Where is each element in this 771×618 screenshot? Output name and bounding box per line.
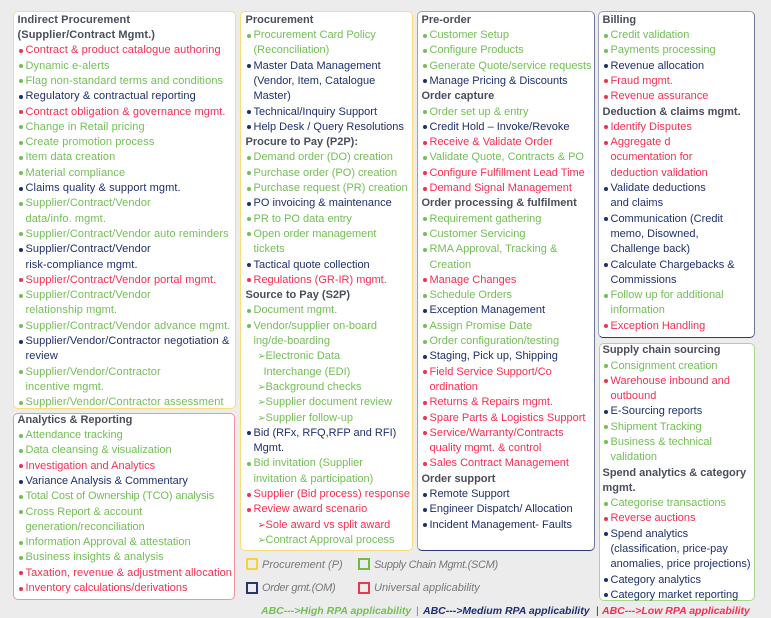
panel: supply chain sourcing bbox=[599, 343, 755, 601]
heading: order processing: Order processing & fulfilment bbox=[422, 197, 577, 209]
heading: indirect procurement: (Supplier/Contract Mgmt.) bbox=[18, 29, 155, 41]
list: source to pay items: invitation & participation) bbox=[254, 473, 373, 485]
list: source to pay items: Document mgmt. bbox=[254, 304, 337, 316]
list: spend analytics items: Spend analytics bbox=[610, 528, 688, 540]
list: analytics items: Investigation and Analytics bbox=[26, 460, 155, 472]
list: indirect procurement items: Supplier/Vendor/Contractor bbox=[26, 366, 161, 378]
legend item: procurement: Procurement (P) bbox=[262, 559, 343, 571]
list: source to pay items: ing/de-boarding bbox=[254, 335, 330, 347]
list: order processing items: Returns & Repairs mgmt. bbox=[430, 396, 553, 408]
legend item: order management: Order gmt.(OM) bbox=[262, 582, 335, 594]
list: billing items: Payments processing bbox=[610, 44, 716, 56]
heading: order support: Order support bbox=[422, 473, 495, 485]
list: order processing items: Field Service Support/Co bbox=[430, 366, 552, 378]
list: analytics items: Business insights & analysis bbox=[26, 551, 164, 563]
list: procurement items: Procurement Card Policy bbox=[254, 29, 376, 41]
list: deduction items: ocumentation for bbox=[610, 151, 692, 163]
list: analytics items: Variance Analysis & Commentary bbox=[26, 475, 188, 487]
list: deduction items: Validate deductions bbox=[610, 182, 706, 194]
list: procure to pay items: Regulations (GR-IR) mgmt. bbox=[254, 274, 387, 286]
list: indirect procurement items: incentive mgmt. bbox=[26, 381, 104, 393]
list: procurement items: (Reconciliation) bbox=[254, 44, 329, 56]
heading: billing: Billing bbox=[602, 14, 636, 26]
list: analytics items: Information Approval & attestation bbox=[26, 536, 191, 548]
list: indirect procurement items: Supplier/Contract/Vendor advance mgmt. bbox=[26, 320, 230, 332]
panel: analytics and reporting bbox=[13, 413, 235, 600]
list: indirect procurement items: Item data creation bbox=[26, 151, 115, 163]
list: order processing items: Manage Changes bbox=[430, 274, 516, 286]
list: indirect procurement items: Material compliance bbox=[26, 167, 125, 179]
list: source to pay items: Sole award vs split award bbox=[266, 519, 390, 531]
list: deduction items: and claims bbox=[610, 197, 663, 209]
list: procure to pay items: Open order management bbox=[254, 228, 376, 240]
list: procurement items: (Vendor, Item, Catalogue bbox=[254, 75, 375, 87]
key: high applicability: ABC--->High RPA applicability bbox=[261, 605, 411, 617]
list: order processing items bbox=[423, 213, 586, 469]
list: pre-order items: Generate Quote/service requests bbox=[430, 60, 592, 72]
list: billing items: Fraud mgmt. bbox=[610, 75, 673, 87]
list: deduction items: Exception Handling bbox=[610, 320, 705, 332]
list: order capture items: Receive & Validate Order bbox=[430, 136, 553, 148]
list: source to pay items: Supplier document review bbox=[266, 396, 392, 408]
list: source to pay items: Electronic Data bbox=[266, 350, 340, 362]
heading: order capture: Order capture bbox=[422, 90, 494, 102]
list: source to pay items: Vendor/supplier on-board bbox=[254, 320, 377, 332]
list: order capture items: Credit Hold – Invoke/Revoke bbox=[430, 121, 570, 133]
list: procure to pay items: PO invoicing & maintenance bbox=[254, 197, 392, 209]
legend: RPA applicability key bbox=[260, 605, 750, 617]
list: order processing items: Exception Management bbox=[430, 304, 545, 316]
list: sourcing items: Shipment Tracking bbox=[610, 421, 702, 433]
list: indirect procurement items: Flag non-standard terms and conditions bbox=[26, 75, 223, 87]
list: deduction items: Commissions bbox=[610, 274, 677, 286]
list: procure to pay items bbox=[247, 151, 408, 286]
list: spend analytics items: Category market reporting bbox=[610, 589, 738, 601]
list: order processing items: Service/Warranty/Contracts bbox=[430, 427, 564, 439]
list: deduction items: memo, Disowned, bbox=[610, 228, 699, 240]
list: procure to pay items: Purchase request (PR) creation bbox=[254, 182, 408, 194]
list: indirect procurement items: Dynamic e-alerts bbox=[26, 60, 110, 72]
list: order processing items: Customer Servicing bbox=[430, 228, 525, 240]
panel: billing and deductions bbox=[598, 11, 755, 338]
list: procurement items: Help Desk / Query Resolutions bbox=[254, 121, 404, 133]
list: source to pay items: Background checks bbox=[266, 381, 362, 393]
heading: deduction and claims: Deduction & claims mgmt. bbox=[602, 106, 741, 118]
legend item: universal applicability: Universal applicability bbox=[374, 582, 480, 594]
list: sourcing items: Warehouse inbound and bbox=[610, 375, 730, 387]
list: order processing items: Creation bbox=[430, 259, 471, 271]
heading: source to pay: Source to Pay (S2P) bbox=[246, 289, 350, 301]
list: analytics items: Attendance tracking bbox=[26, 429, 123, 441]
list: order processing items: Sales Contract Management bbox=[430, 457, 569, 469]
list: source to pay items: Mgmt. bbox=[254, 442, 284, 454]
list: indirect procurement items: Create promotion process bbox=[26, 136, 154, 148]
heading: analytics and reporting: Analytics & Reporting bbox=[18, 414, 132, 426]
list: procurement items: Technical/Inquiry Support bbox=[254, 106, 377, 118]
list: sourcing items: validation bbox=[610, 451, 657, 463]
list: procurement items: Master Data Management bbox=[254, 60, 381, 72]
list: indirect procurement items: data/info. mgmt. bbox=[26, 213, 106, 225]
panel: procurement bbox=[240, 11, 413, 551]
list: indirect procurement items: review bbox=[26, 350, 58, 362]
list: deduction items: information bbox=[610, 304, 665, 316]
list: source to pay items: Bid invitation (Supplier bbox=[254, 457, 363, 469]
list: source to pay items: Contract Approval process bbox=[266, 534, 395, 546]
list: order processing items: ordination bbox=[430, 381, 478, 393]
list: indirect procurement items: Change in Retail pricing bbox=[26, 121, 145, 133]
heading: indirect procurement bbox=[18, 14, 155, 41]
list: order support items bbox=[423, 488, 573, 531]
heading: supply chain sourcing: Supply chain sourcing bbox=[602, 344, 720, 356]
heading: pre-order: Pre-order bbox=[422, 14, 471, 26]
list: pre-order items: Customer Setup bbox=[430, 29, 509, 41]
list: order processing items: Schedule Orders bbox=[430, 289, 512, 301]
list: indirect procurement items: risk-compliance mgmt. bbox=[26, 259, 138, 271]
legend item: supply chain management: Supply Chain Mgmt.(SCM) bbox=[374, 559, 498, 571]
list: spend analytics items: Categorise transactions bbox=[610, 497, 726, 509]
list: deduction items: Identify Disputes bbox=[610, 121, 692, 133]
heading: procurement: Procurement bbox=[246, 14, 313, 26]
heading: procure to pay: Procure to Pay (P2P): bbox=[246, 136, 358, 148]
list: order processing items: RMA Approval, Tracking & bbox=[430, 243, 557, 255]
list: deduction items: Communication (Credit bbox=[610, 213, 723, 225]
list: deduction items: Challenge back) bbox=[610, 243, 690, 255]
list: order capture items: Order set up & entry bbox=[430, 106, 529, 118]
legend: RPA applicability key: | bbox=[416, 605, 419, 617]
list: analytics items: Inventory calculations/derivations bbox=[26, 582, 188, 594]
list: procure to pay items: PR to PO data entry bbox=[254, 213, 352, 225]
list: procurement items bbox=[247, 29, 404, 133]
list: procure to pay items: Tactical quote collection bbox=[254, 259, 370, 271]
list: analytics items: Cross Report & account bbox=[26, 506, 142, 518]
list: source to pay items: Supplier follow-up bbox=[266, 412, 353, 424]
list: order capture items: Demand Signal Management bbox=[430, 182, 572, 194]
legend: RPA applicability key: | bbox=[596, 605, 599, 617]
list: billing items: Credit validation bbox=[610, 29, 689, 41]
list: pre-order items: Manage Pricing & Discounts bbox=[430, 75, 568, 87]
list: source to pay items bbox=[247, 304, 410, 546]
list: indirect procurement items: Contract & product catalogue authoring bbox=[26, 44, 221, 56]
list: analytics items: Taxation, revenue & adjustment allocation bbox=[26, 567, 232, 579]
list: deduction items: deduction validation bbox=[610, 167, 708, 179]
list: analytics items: generation/reconciliation bbox=[26, 521, 145, 533]
heading: spend analytics: Spend analytics & category bbox=[602, 467, 746, 479]
list: sourcing items: Consignment creation bbox=[610, 360, 718, 372]
list: deduction items: Calculate Chargebacks & bbox=[610, 259, 735, 271]
list: spend analytics items: (classification, price-pay bbox=[610, 543, 728, 555]
list: procure to pay items: Demand order (DO) creation bbox=[254, 151, 393, 163]
list: sourcing items bbox=[604, 360, 730, 463]
list: analytics items: Total Cost of Ownership (TCO) analysis bbox=[26, 490, 214, 502]
list: spend analytics items bbox=[604, 497, 751, 601]
list: spend analytics items: Category analytics bbox=[610, 574, 701, 586]
list: deduction items: Follow up for additional bbox=[610, 289, 724, 301]
list: indirect procurement items: Supplier/Contract/Vendor portal mgmt. bbox=[26, 274, 216, 286]
list: procure to pay items: Purchase order (PO) creation bbox=[254, 167, 397, 179]
list: order processing items: Staging, Pick up, Shipping bbox=[430, 350, 558, 362]
list: sourcing items: outbound bbox=[610, 390, 656, 402]
list: source to pay items: Bid (RFx, RFQ,RFP and RFI) bbox=[254, 427, 396, 439]
list: order processing items: Requirement gathering bbox=[430, 213, 541, 225]
list: order support items: Incident Management- Faults bbox=[430, 519, 572, 531]
heading: indirect procurement: Indirect Procurement bbox=[18, 14, 130, 26]
list: billing items: Revenue assurance bbox=[610, 90, 708, 102]
list: order capture items bbox=[423, 106, 585, 194]
list: sourcing items: Business & technical bbox=[610, 436, 712, 448]
heading: spend analytics bbox=[602, 467, 746, 494]
list: order processing items: Spare Parts & Logistics Support bbox=[430, 412, 585, 424]
list: order capture items: Configure Fulfillment Lead Time bbox=[430, 167, 585, 179]
list: indirect procurement items: Supplier/Contract/Vendor bbox=[26, 197, 151, 209]
list: sourcing items: E-Sourcing reports bbox=[610, 405, 702, 417]
list: indirect procurement items: Claims quality & support mgmt. bbox=[26, 182, 181, 194]
list: procure to pay items: tickets bbox=[254, 243, 285, 255]
heading: spend analytics: mgmt. bbox=[602, 482, 636, 494]
list: indirect procurement items bbox=[19, 44, 230, 408]
list: indirect procurement items: Supplier/Contract/Vendor auto reminders bbox=[26, 228, 229, 240]
panel: order management bbox=[417, 11, 595, 551]
list: order support items: Remote Support bbox=[430, 488, 510, 500]
legend: area colours bbox=[246, 558, 498, 594]
list: order processing items: Order configuration/testing bbox=[430, 335, 559, 347]
list: analytics items bbox=[19, 429, 232, 594]
list: source to pay items: Review award scenario bbox=[254, 503, 367, 515]
list: pre-order items bbox=[423, 29, 592, 87]
list: indirect procurement items: Supplier/Contract/Vendor bbox=[26, 289, 151, 301]
list: indirect procurement items: Contract obligation & governance mgmt. bbox=[26, 106, 226, 118]
list: indirect procurement items: Supplier/Vendor/Contractor assessment bbox=[26, 396, 224, 408]
list: indirect procurement items: Regulatory & contractual reporting bbox=[26, 90, 196, 102]
list: indirect procurement items: Supplier/Contract/Vendor bbox=[26, 243, 151, 255]
list: procurement items: Master) bbox=[254, 90, 291, 102]
list: source to pay items: Supplier (Bid process) response bbox=[254, 488, 410, 500]
key: low applicability: ABC--->Low RPA applicability bbox=[602, 605, 750, 617]
list: order processing items: Assign Promise Date bbox=[430, 320, 532, 332]
list: deduction items bbox=[604, 121, 735, 332]
list: analytics items: Data cleansing & visualization bbox=[26, 444, 172, 456]
list: billing items: Revenue allocation bbox=[610, 60, 704, 72]
list: order processing items: quality mgmt. & control bbox=[430, 442, 541, 454]
list: spend analytics items: Reverse auctions bbox=[610, 512, 696, 524]
list: indirect procurement items: Supplier/Vendor/Contractor negotiation & bbox=[26, 335, 229, 347]
list: billing items bbox=[604, 29, 716, 102]
list: order capture items: Validate Quote, Contracts & PO bbox=[430, 151, 584, 163]
list: spend analytics items: anomalies, price projections) bbox=[610, 558, 751, 570]
list: order support items: Engineer Dispatch/ Allocation bbox=[430, 503, 573, 515]
list: source to pay items: Interchange (EDI) bbox=[264, 366, 350, 378]
panel: indirect procurement bbox=[13, 11, 236, 409]
list: indirect procurement items: relationship mgmt. bbox=[26, 304, 117, 316]
key: medium applicability: ABC--->Medium RPA applicability bbox=[423, 605, 590, 617]
list: pre-order items: Configure Products bbox=[430, 44, 524, 56]
list: deduction items: Aggregate d bbox=[610, 136, 670, 148]
